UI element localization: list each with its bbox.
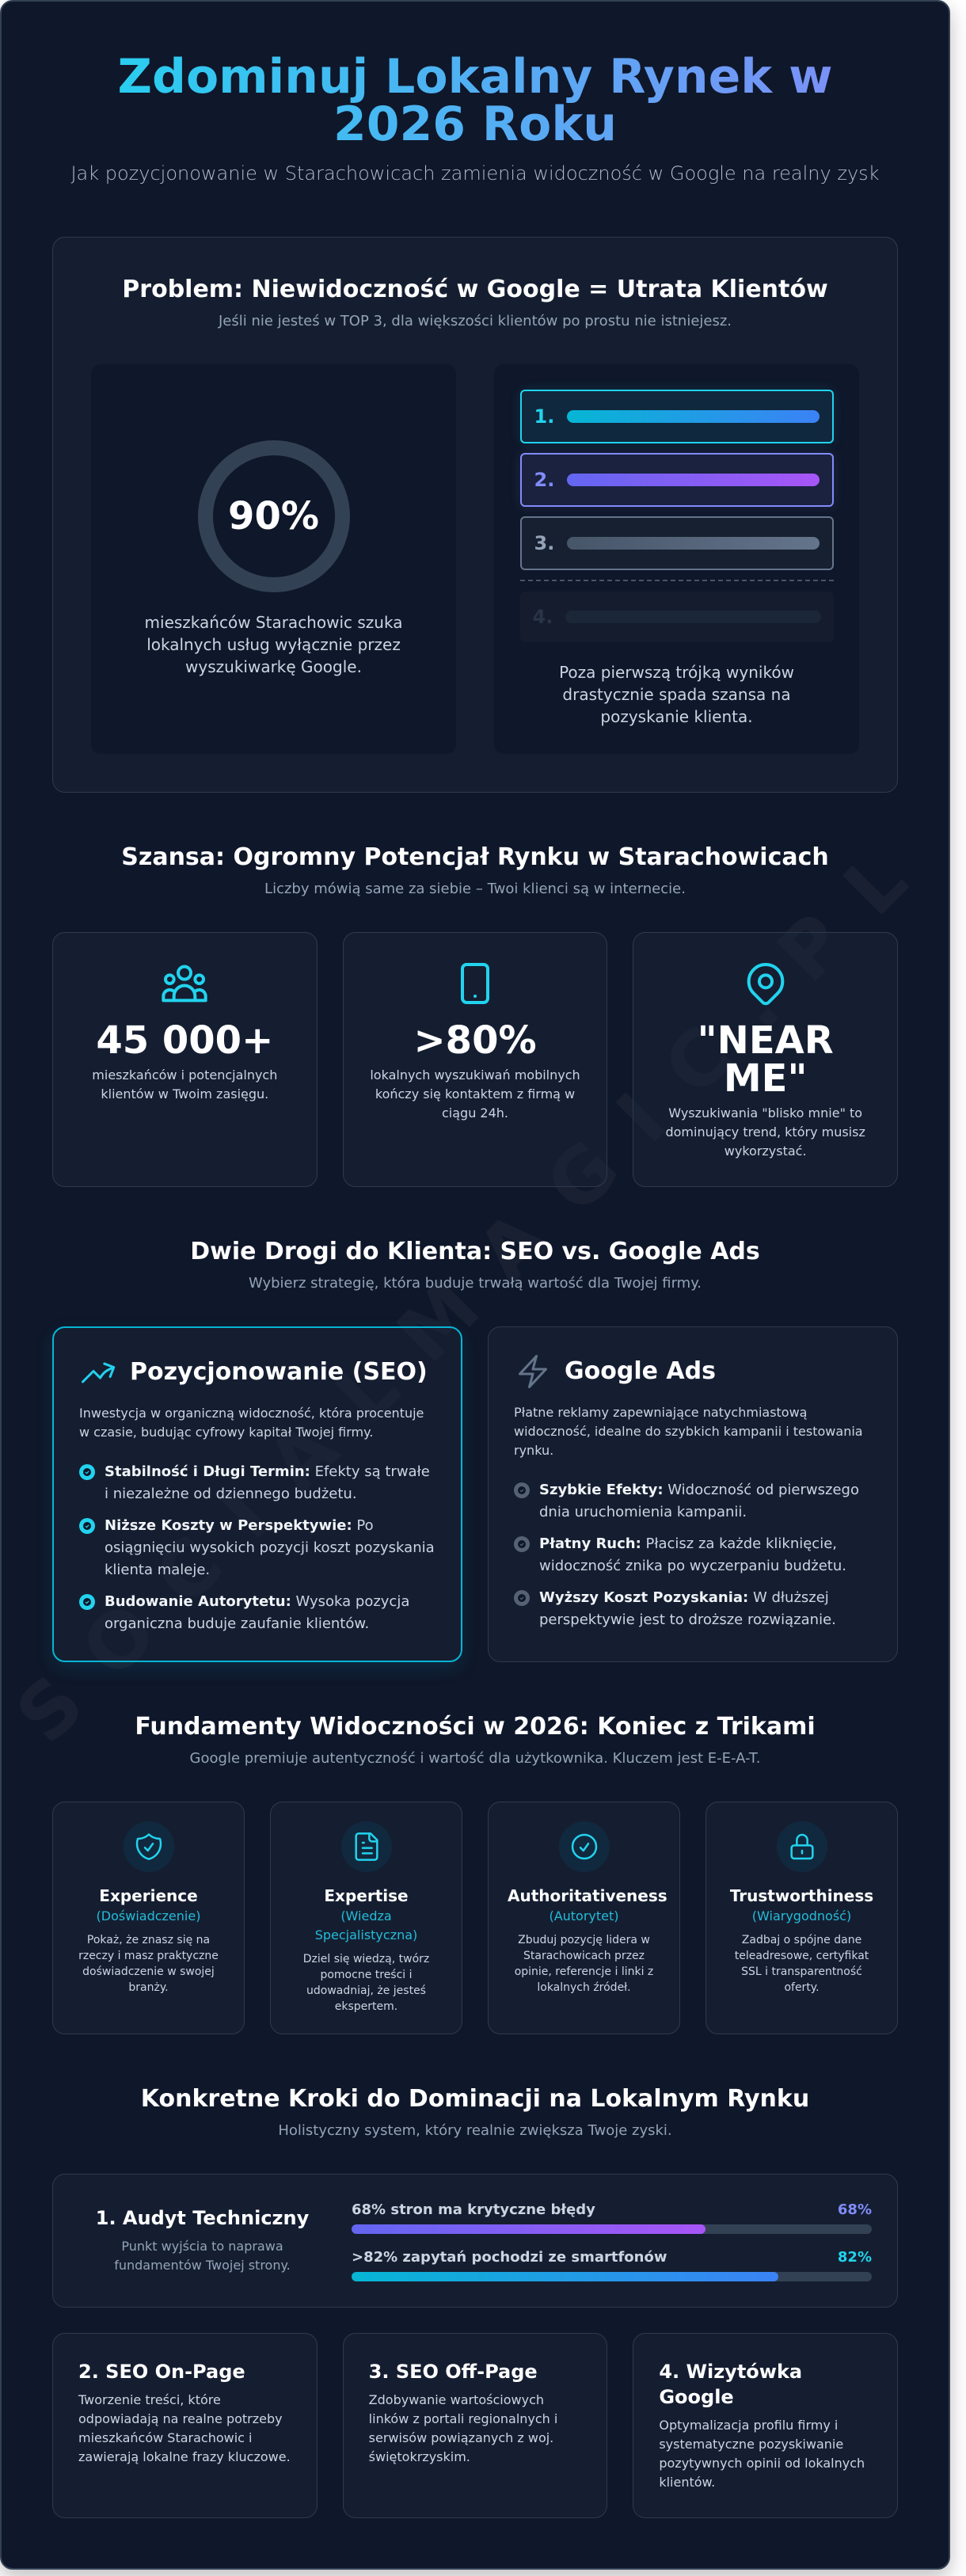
stat description: mieszkańców i potencjalnych klientów w Twoim zasięgu. [92,1067,277,1102]
audit text: 1. Audyt Techniczny [96,2207,309,2229]
card title: Experience [99,1886,198,1905]
Ads point 1: Szybkie Efekty: Widoczność od pierwszego dnia uruchomienia kampanii. [539,1482,859,1520]
section: E-E-A-T [52,1713,898,2034]
heading: problem [122,276,828,329]
heading: steps [141,2085,809,2139]
progress bars [352,2201,872,2281]
stat description: Wyszukiwania "blisko mnie" to dominujący trend, który musisz wykorzystać. [665,1105,865,1159]
progress label 68%: 68% stron ma krytyczne błędy [352,2201,595,2218]
card: trustworthiness [705,1802,898,2034]
SEO benefit 1: Stabilność i Długi Termin: Efekty są trwałe i niezależne od dziennego budżetu. [105,1463,430,1502]
card title: Trustworthiness [730,1886,873,1905]
ranking row 3 [519,516,833,570]
icon: check circle [559,1821,610,1872]
title: Zdominuj Lokalny Rynek w 2026 Roku [117,49,833,152]
panel: 90 percent statistic [91,364,456,754]
stat number: 45 000+ [96,1018,273,1063]
audit text [96,2207,309,2273]
Ads point 2: Płatny Ruch: Płacisz za każde kliknięcie, widoczność znika po wyczerpaniu budżetu. [539,1535,846,1574]
audit text: Punkt wyjścia to naprawa fundamentów Twojej strony. [114,2239,291,2273]
Ads heading with icon [519,1354,716,1389]
heading: steps: Holistyczny system, który realnie zwiększa Twoje zyski. [278,2122,672,2139]
card: SEO off-page [343,2333,607,2518]
ranking row 2 [519,453,833,507]
stat number: >80% [413,1018,537,1063]
SEO benefit 3: Budowanie Autorytetu: Wysoka pozycja organiczna buduje zaufanie klientów. [105,1593,409,1632]
ranking row 2: 2. [534,469,554,491]
icon: lock [776,1821,827,1872]
Ads point 3: Wyższy Koszt Pozyskania: W dłuższej perspektywie jest to droższe rozwiązanie. [539,1589,836,1628]
panel: Google Ads [488,1326,898,1662]
section: steps [52,2085,898,2518]
card description: Dziel się wiedzą, twórz pomocne treści i udowadniaj, że jesteś ekspertem. [303,1953,429,2013]
card: near me [633,932,898,1187]
SEO description: Inwestycja w organiczną widoczność, która procentuje w czasie, budując cyfrowy kapitał Twojej firmy. [79,1406,424,1440]
card subtitle: (Wiedza Specjalistyczna) [315,1908,417,1942]
progress label 68%: 68% [838,2201,872,2218]
card subtitle: (Doświadczenie) [97,1908,200,1923]
heading: steps: Konkretne Kroki do Dominacji na Lokalnym Rynku [141,2085,809,2113]
card subtitle: (Wiarygodność) [752,1908,851,1923]
progress bar 82% [352,2272,872,2281]
heading: SEO vs Ads: Dwie Drogi do Klienta: SEO vs. Google Ads [190,1238,760,1265]
card: Google Business Profile: Optymalizacja profilu firmy i systematyczne pozyskiwanie pozytywnych opinii od lokalnych klientów. [659,2418,865,2490]
heading: opportunity: Szansa: Ogromny Potencjał Rynku w Starachowicach [121,843,829,871]
card: SEO on-page: 2. SEO On-Page [78,2361,245,2383]
heading: opportunity: Liczby mówią same za siebie – Twoi klienci są w internecie. [264,881,686,897]
progress label 82% [352,2249,872,2266]
card title: Authoritativeness [508,1886,667,1905]
ranking row 4 [519,592,833,642]
ranking row 4: 4. [532,606,553,628]
card: SEO on-page [52,2333,318,2518]
icon: document [340,1821,391,1872]
icon: shield [124,1821,174,1872]
progress label 82%: >82% zapytań pochodzi ze smartfonów [352,2249,667,2266]
card description: Pokaż, że znasz się na rzeczy i masz praktyczne doświadczenie w swojej branży. [78,1934,219,1994]
heading: problem: Jeśli nie jesteś w TOP 3, dla większości klientów po prostu nie istniejesz. [219,313,732,329]
card: SEO off-page: Zdobywanie wartościowych linków z portali regionalnych i serwisów powiązanych z woj. świętokrzyskim. [369,2392,557,2464]
section: SEO vs Ads [51,1238,898,1669]
card: experience [52,1802,245,2034]
panel: technical audit [52,2174,898,2308]
watermark: SOCIALMAGIC.PL [0,809,950,1760]
card: authoritativeness [488,1802,680,2034]
Ads description: Płatne reklamy zapewniające natychmiastową widoczność, idealne do szybkich kampanii i testowania rynku. [514,1405,863,1458]
SEO heading with icon: Pozycjonowanie (SEO) [130,1358,428,1386]
progress label 82%: 82% [838,2249,872,2266]
donut: 90%: 90% [228,494,319,538]
heading: E-E-A-T [135,1713,816,1767]
progress label 68% [352,2201,872,2218]
donut: 90% [198,440,350,592]
ranking row 3: 3. [534,532,554,554]
card: Google Business Profile: 4. Wizytówka Google [659,2361,802,2408]
heading: SEO vs Ads: Wybierz strategię, która buduje trwałą wartość dla Twojej firmy. [249,1275,702,1292]
SEO benefit 2: Niższe Koszty w Perspektywie: Po osiągnięciu wysokich pozycji koszt pozyskania klienta maleje. [105,1517,435,1578]
panel: problem [52,237,898,793]
panel: SEO [52,1326,462,1662]
card: Google Business Profile [633,2333,898,2518]
card title: Expertise [324,1886,409,1905]
stat description: lokalnych wyszukiwań mobilnych kończy się kontaktem z firmą w ciągu 24h. [370,1067,580,1121]
card: residents [52,932,318,1187]
icon: location pin [747,963,784,1006]
heading: opportunity [121,843,829,897]
card subtitle: (Autorytet) [549,1908,619,1923]
section: opportunity [52,843,898,1187]
icon: people [162,965,207,1003]
heading: SEO vs Ads [190,1238,760,1292]
card: mobile searches [343,932,607,1187]
card description: Zbuduj pozycję lidera w Starachowicach przez opinie, referencje i linki z lokalnych źródeł. [515,1934,653,1994]
ranking row 1: 1. [534,405,554,428]
heading: E-E-A-T: Fundamenty Widoczności w 2026: Koniec z Trikami [135,1713,816,1741]
icon: phone [461,963,489,1004]
caption: ranking: Poza pierwszą trójką wyników drastycznie spada szansa na pozyskanie klienta. [559,663,794,726]
card: expertise [270,1802,462,2034]
subtitle: Jak pozycjonowanie w Starachowicach zamienia widoczność w Google na realny zysk [70,162,880,185]
ranking row 1 [519,390,833,443]
card: SEO on-page: Tworzenie treści, które odpowiadają na realne potrzeby mieszkańców Starachowic i zawierają lokalne frazy kluczowe. [78,2392,291,2464]
panel: search ranking [494,364,859,754]
Ads heading with icon: Google Ads [565,1357,716,1385]
stat number: "NEAR ME" [698,1018,834,1101]
card: SEO off-page: 3. SEO Off-Page [369,2361,538,2383]
heading: problem: Problem: Niewidoczność w Google = Utrata Klientów [122,276,828,303]
progress bar 68% [352,2224,872,2234]
heading: E-E-A-T: Google premiuje autentyczność i wartość dla użytkownika. Kluczem jest E-E-A-T. [190,1750,760,1767]
card description: Zadbaj o spójne dane teleadresowe, certyfikat SSL i transparentność oferty. [735,1934,869,1994]
caption: 90% statistic: mieszkańców Starachowic szuka lokalnych usług wyłącznie przez wyszukiwarkę Google. [145,613,402,676]
